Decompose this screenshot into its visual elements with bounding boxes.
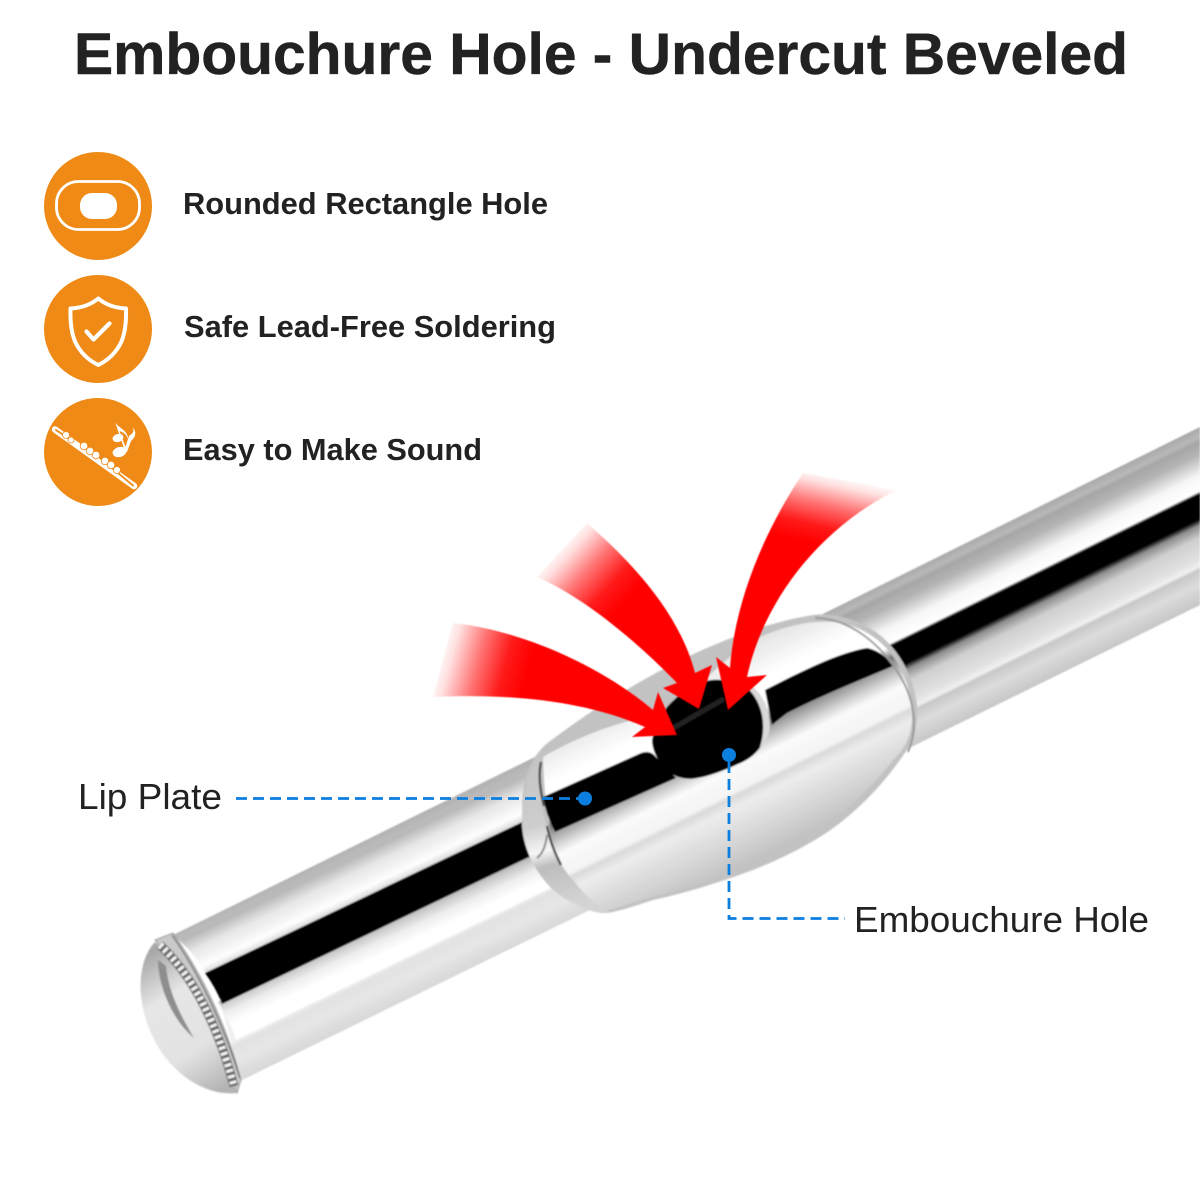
tube left: lower reflection (218, 819, 600, 1040)
right rim of lip plate (815, 618, 914, 752)
foot end collar (155, 933, 241, 1093)
feature: safe lead-free soldering (44, 275, 556, 383)
marker dot: lip plate (578, 792, 592, 806)
tube left: lower body (218, 815, 600, 1082)
icon: shield with check (44, 275, 152, 383)
label: safe lead-free soldering: Safe Lead-Free Soldering (184, 309, 556, 344)
label: lip plate: Lip Plate (78, 776, 222, 817)
red arrow: left (433, 623, 677, 737)
label: embouchure hole: Embouchure Hole (854, 899, 1149, 940)
title: Embouchure Hole - Undercut Beveled (74, 22, 1128, 87)
callout: lip plate (78, 776, 592, 817)
red arrow: right (716, 473, 897, 710)
dome reflection (158, 960, 194, 1038)
feature: easy to make sound (44, 398, 482, 506)
red arrow: middle (537, 523, 712, 709)
left rim of lip plate (522, 752, 610, 913)
left rim streak (537, 835, 547, 858)
feature: rounded rectangle hole (44, 152, 548, 260)
leader line: lip plate (236, 797, 580, 800)
marker dot: embouchure hole (722, 748, 736, 762)
black reflection: lip plate right (765, 648, 893, 725)
callout: embouchure hole (722, 748, 1149, 940)
hole bevel highlight (745, 685, 770, 750)
flute headjoint illustration (141, 427, 1200, 1093)
tube left: black reflection (205, 785, 600, 1004)
black reflection: lip plate left (543, 752, 676, 832)
leader line: embouchure hole (729, 762, 845, 918)
label: easy to make sound: Easy to Make Sound (183, 432, 482, 467)
icon: rounded rectangle hole (44, 152, 152, 260)
lip plate outer (522, 614, 917, 913)
foot end dome (141, 942, 237, 1093)
left rim shading (540, 762, 561, 865)
label: rounded rectangle hole: Rounded Rectangle Hole (183, 186, 548, 221)
lip plate polished surface (543, 622, 912, 911)
hole inner sheen (675, 700, 722, 727)
embouchure hole (652, 680, 768, 779)
tube right of lip plate (720, 427, 1200, 841)
icon: flute and music notes (44, 398, 152, 506)
tube left: upper reflection (173, 725, 600, 975)
knurled ring (160, 935, 240, 1086)
